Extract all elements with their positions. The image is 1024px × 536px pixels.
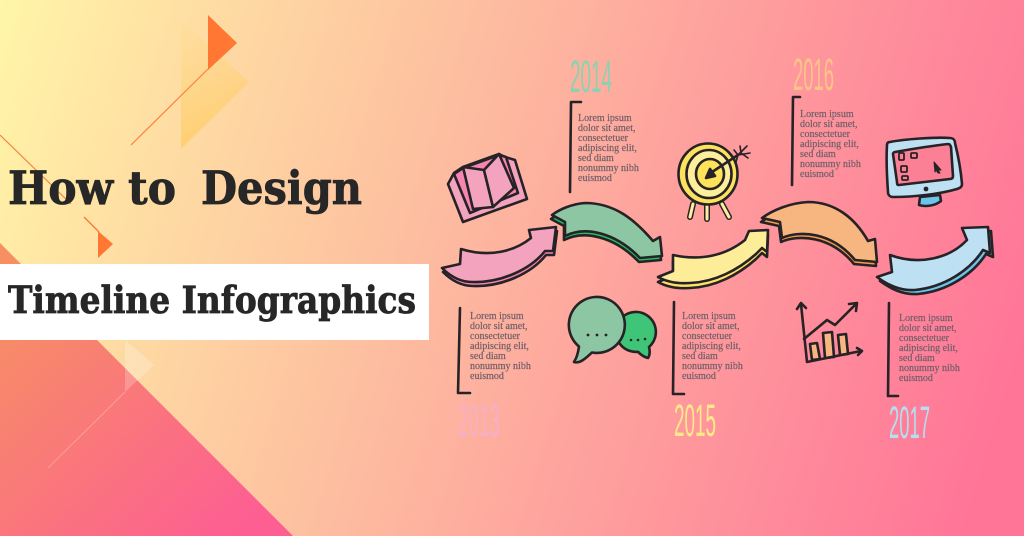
subtitle banner	[0, 264, 429, 340]
text block: 2015: nonummy nibh	[682, 361, 743, 372]
text block: 2014: dolor sit amet,	[578, 123, 636, 134]
arrow: light blue	[877, 227, 993, 294]
text block: 2014: sed diam	[578, 153, 614, 164]
arrow: yellow	[658, 230, 768, 288]
text block: 2014: Lorem ipsum	[578, 113, 632, 124]
text block: 2015: adipiscing elit,	[682, 341, 741, 352]
text: 2016	[793, 49, 834, 100]
text block: 2013: nonummy nibh	[470, 361, 531, 372]
text block: 2017: consectetuer	[899, 333, 950, 344]
bracket: 2017	[888, 303, 898, 396]
heading: How to Design: How to	[8, 161, 176, 215]
text block: 2017: sed diam	[899, 353, 935, 364]
text block: 2016: euismod	[800, 169, 834, 180]
text block: 2013: adipiscing elit,	[470, 341, 529, 352]
bracket: 2013	[458, 308, 470, 393]
text block: 2014: adipiscing elit,	[578, 143, 637, 154]
text: 2013	[458, 395, 500, 446]
heading: How to Design: Design	[201, 161, 362, 215]
bracket: 2015	[673, 302, 684, 394]
text block: 2015: euismod	[682, 371, 716, 382]
text block: 2013: sed diam	[470, 351, 506, 362]
arrow: orange	[761, 202, 877, 266]
text block: 2013: euismod	[470, 371, 504, 382]
decorative shapes: top triangles and lines	[0, 15, 249, 258]
icon: open book	[448, 154, 527, 222]
icon: speech bubbles	[569, 297, 656, 362]
text block: 2013: Lorem ipsum	[470, 311, 524, 322]
icon: target with arrow	[678, 144, 750, 219]
text block: 2017: nonummy nibh	[899, 363, 960, 374]
text block: 2016: dolor sit amet,	[800, 119, 858, 130]
icon: computer monitor	[887, 138, 962, 206]
subtitle banner: Timeline Infographics	[8, 278, 416, 322]
text block: 2014: euismod	[578, 173, 612, 184]
decorative triangle: bottom-left pink	[0, 243, 293, 536]
text block: 2017: euismod	[899, 373, 933, 384]
text block: 2015: sed diam	[682, 351, 718, 362]
arrow: green	[551, 203, 662, 262]
text block: 2014: nonummy nibh	[578, 163, 639, 174]
text block: 2014: consectetuer	[578, 133, 629, 144]
icon: growth bar chart	[797, 303, 862, 362]
text block: 2013: dolor sit amet,	[470, 321, 528, 332]
text block: 2015: Lorem ipsum	[682, 311, 736, 322]
bracket: 2014	[570, 102, 581, 192]
text block: 2016: adipiscing elit,	[800, 139, 859, 150]
text block: 2016: nonummy nibh	[800, 159, 861, 170]
heading: How to Design	[8, 161, 362, 215]
text: 2014	[570, 51, 612, 102]
text block: 2016: consectetuer	[800, 129, 851, 140]
text block: 2013: consectetuer	[470, 331, 521, 342]
text block: 2015: consectetuer	[682, 331, 733, 342]
decorative pale triangle and line	[48, 340, 154, 468]
text block: 2017: Lorem ipsum	[899, 313, 953, 324]
text: 2017	[889, 397, 930, 448]
bracket: 2016	[792, 97, 800, 185]
text: 2015	[674, 395, 716, 446]
text block: 2016: sed diam	[800, 149, 836, 160]
text block: 2017: dolor sit amet,	[899, 323, 956, 334]
text block: 2016: Lorem ipsum	[800, 109, 854, 120]
text block: 2015: dolor sit amet,	[682, 321, 740, 332]
text block: 2017: adipiscing elit,	[899, 343, 958, 354]
arrow: pink	[442, 227, 557, 286]
